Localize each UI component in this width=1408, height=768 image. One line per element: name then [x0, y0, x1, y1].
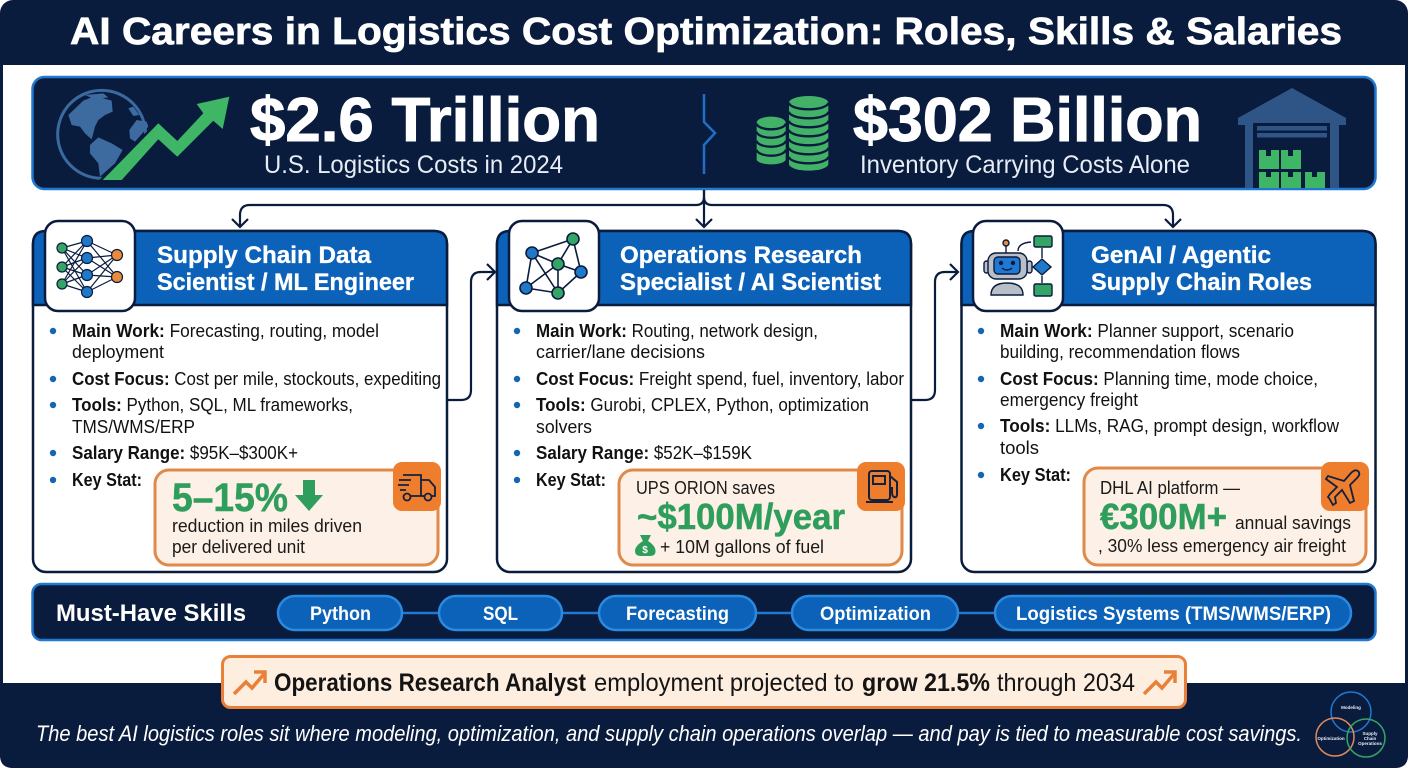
heading: Scientist / ML Engineer [157, 269, 414, 296]
skill pill: SQL [439, 596, 562, 630]
icon: trend arrow right [1144, 672, 1175, 694]
growth sentence: Operations Research Analyst [274, 669, 587, 697]
bullet list: deployment [72, 342, 164, 362]
panel: operations research card [497, 221, 911, 572]
skill pill: Logistics Systems: Logistics Systems (TMS/WMS/ERP) [1016, 604, 1331, 625]
skill pill: Python: Python [310, 604, 371, 625]
callout: DHL savings: DHL AI platform — [1100, 478, 1240, 498]
bullet list: emergency freight [1000, 390, 1138, 410]
arrow: card 2 to card 3 [911, 264, 958, 400]
icon: warehouse [1238, 88, 1346, 188]
callout: DHL savings: , 30% less emergency air freight [1098, 536, 1346, 556]
icon: money bag: $ [642, 545, 648, 556]
skill pill: Optimization: Optimization [820, 604, 931, 625]
icon: network graph [509, 221, 599, 311]
stat label: inventory costs: Inventory Carrying Costs Alone [860, 151, 1190, 179]
bullet list: Cost Focus: Freight spend, fuel, inventory, labor [536, 369, 904, 389]
bullet list [978, 321, 1340, 485]
icon: venn diagram: Modeling [1341, 705, 1361, 710]
bullet list: TMS/WMS/ERP [72, 417, 195, 437]
bullet list: Salary Range: $52K–$159K [536, 443, 752, 463]
heading: Supply Chain Roles [1091, 269, 1312, 296]
icon: venn diagram: Optimization [1317, 736, 1345, 741]
heading [1091, 242, 1312, 296]
icon: fuel pump [857, 462, 905, 511]
skill pill: Optimization [792, 596, 958, 630]
growth sentence: grow 21.5% [862, 669, 990, 697]
icon: venn diagram [1316, 692, 1385, 757]
bullet list: Key Stat: [536, 470, 606, 490]
callout: UPS ORION: ~$100M/year [637, 496, 845, 537]
icon: truck [393, 462, 441, 511]
bullet list: Cost Focus: Planning time, mode choice, [1000, 369, 1318, 389]
arrows: hero to role cards [232, 190, 1181, 227]
callout: UPS ORION [619, 462, 905, 565]
arrow: card 1 to card 2 [447, 264, 495, 400]
heading: Specialist / AI Scientist [620, 269, 881, 296]
callout: miles reduction: 5–15% [172, 476, 288, 520]
callout: miles reduction: reduction in miles driven [172, 516, 362, 536]
icon: neural network [45, 221, 135, 311]
skill pill: Logistics Systems [995, 596, 1351, 630]
icon: coin stacks [757, 96, 828, 171]
bullet list: solvers [536, 417, 592, 437]
heading: skills: Must-Have Skills [56, 600, 246, 627]
skill pill: SQL: SQL [483, 604, 518, 625]
card header [33, 231, 447, 305]
callout: DHL savings: annual savings [1235, 513, 1351, 533]
growth sentence: through 2034 [997, 669, 1135, 697]
bullet list: carrier/lane decisions [536, 342, 705, 362]
icon: venn diagram: Operations [1358, 741, 1382, 746]
icon: trend arrow left [234, 672, 265, 694]
callout: UPS ORION: + 10M gallons of fuel [660, 537, 824, 557]
growth sentence [274, 669, 1135, 697]
icon: venn diagram: Chain [1364, 736, 1376, 741]
bullet list: Main Work: Planner support, scenario [1000, 321, 1294, 341]
footer takeaway: The best AI logistics roles sit where modeling, optimization, and supply chain operations overlap — and pay is tied to measurable cost savings. [36, 721, 1302, 746]
skill pill: Python [278, 596, 402, 630]
growth sentence: employment projected to [594, 669, 854, 697]
title: AI Careers in Logistics Cost Optimization: Roles, Skills & Salaries [70, 11, 1342, 53]
panel: genai card [962, 221, 1376, 572]
bullet list: building, recommendation flows [1000, 342, 1240, 362]
callout: DHL savings: €300M+ [1100, 496, 1227, 537]
bullet list: Key Stat: [1000, 465, 1071, 485]
card header [962, 231, 1376, 305]
heading [157, 242, 414, 296]
callout: DHL savings [1084, 462, 1369, 565]
heading [620, 242, 881, 296]
bullet list: Tools: Gurobi, CPLEX, Python, optimization [536, 395, 869, 415]
panel: hero stats [32, 77, 1376, 189]
callout: miles reduction: per delivered unit [172, 537, 305, 557]
divider chevron [704, 94, 715, 174]
bullet list: Tools: Python, SQL, ML frameworks, [72, 395, 353, 415]
bullet list: Key Stat: [72, 470, 142, 490]
icon: rising arrow [103, 97, 229, 180]
bullet list: Salary Range: $95K–$300K+ [72, 443, 298, 463]
stat: 2.6 trillion: $2.6 Trillion [250, 86, 600, 155]
callout: employment growth [222, 656, 1186, 708]
heading: Supply Chain Data [157, 242, 371, 269]
bullet list: tools [1000, 438, 1039, 458]
bullet list: Main Work: Forecasting, routing, model [72, 321, 379, 341]
skill pill: Forecasting: Forecasting [626, 604, 729, 625]
bullet list [50, 321, 441, 490]
panel: data scientist card [33, 221, 447, 572]
skill pill: Forecasting [599, 596, 756, 630]
footer band [0, 683, 1408, 768]
bullet list: Cost Focus: Cost per mile, stockouts, expediting [72, 369, 441, 389]
bullet list [514, 321, 904, 490]
icon: globe [58, 90, 148, 178]
icon: robot workflow [973, 221, 1063, 311]
card header [497, 231, 911, 305]
stat: 302 billion: $302 Billion [853, 86, 1202, 155]
callout: miles reduction [155, 462, 441, 565]
heading: Operations Research [620, 242, 862, 269]
panel: must-have skills [32, 584, 1376, 640]
stat label: logistics costs: U.S. Logistics Costs in 2024 [264, 151, 563, 179]
bullet list: Tools: LLMs, RAG, prompt design, workflow [1000, 416, 1340, 436]
icon: venn diagram: Supply [1362, 731, 1378, 736]
icon: money bag [635, 535, 656, 556]
icon: down arrow [295, 480, 323, 511]
heading: GenAI / Agentic [1091, 242, 1271, 269]
icon: plane [1321, 462, 1369, 511]
callout: UPS ORION: UPS ORION saves [636, 478, 775, 498]
bullet list: Main Work: Routing, network design, [536, 321, 818, 341]
